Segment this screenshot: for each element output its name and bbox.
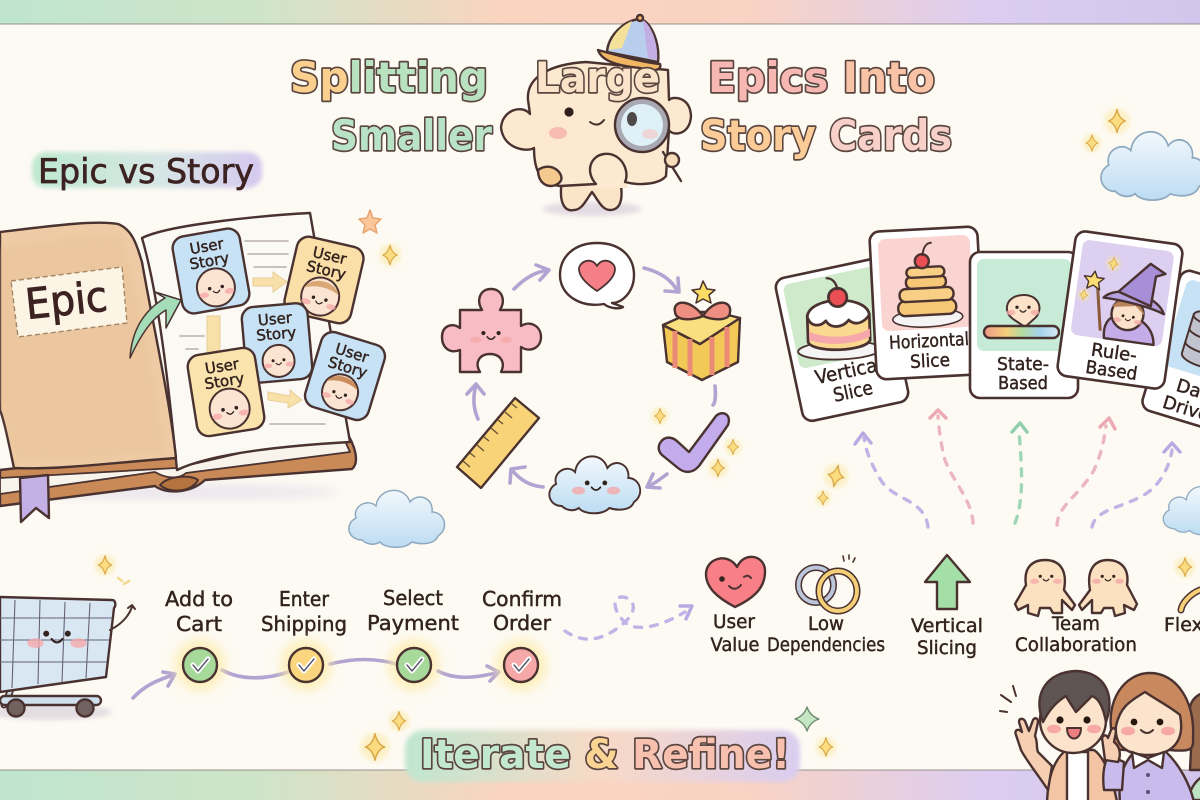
character: third child xyxy=(1188,692,1200,800)
step: enter shipping: Enter xyxy=(279,587,330,611)
value: vertical slicing: Vertical xyxy=(911,615,983,637)
card: horizontal slice xyxy=(869,226,985,380)
story card: user story 1: Story xyxy=(188,249,231,273)
sparkles: top right xyxy=(1083,108,1130,152)
banner: Iterate & Refine!: Iterate & Refine! xyxy=(420,732,790,778)
mascot: puzzle piece detective xyxy=(501,62,691,216)
cloud: centre left xyxy=(349,490,445,547)
step: select payment xyxy=(367,586,459,691)
step: select payment: Select xyxy=(383,586,443,610)
sparkles right of banner xyxy=(795,707,836,757)
story card: user story 2 xyxy=(282,234,366,326)
value: user value: User xyxy=(713,611,755,633)
story card: user story 5: User xyxy=(204,355,241,378)
title: Epics Into xyxy=(708,53,935,102)
cycle arrows xyxy=(467,265,715,488)
value: low dependencies: Low xyxy=(808,613,844,635)
story card: user story 1 xyxy=(171,227,251,315)
value: user value: Value xyxy=(710,634,760,656)
card: rule based xyxy=(1056,230,1184,390)
card: horizontal slice: Slice xyxy=(910,350,951,373)
story card: user story 3: Story xyxy=(256,323,297,345)
team characters xyxy=(1000,671,1200,800)
character: boy xyxy=(1000,671,1117,800)
story card: user story 4: Story xyxy=(326,353,370,382)
card: state based: State- xyxy=(997,354,1049,375)
icon: gift box with star xyxy=(663,281,740,380)
step: select payment: Payment xyxy=(367,611,459,635)
icon: purple check with sparkles xyxy=(652,408,741,478)
story card: user story 2: Story xyxy=(305,257,348,284)
card: state based xyxy=(970,252,1078,398)
story card: user story 5 xyxy=(186,346,266,438)
icon: ruler xyxy=(457,398,539,488)
cloud: top right xyxy=(1101,132,1200,200)
bottom watercolor band xyxy=(0,770,1200,800)
sparkle above cart xyxy=(95,555,129,584)
card: state based: Based xyxy=(998,373,1048,394)
title xyxy=(290,53,952,160)
story card: user story 3 xyxy=(241,302,313,384)
value: vertical slicing xyxy=(911,555,983,659)
cloud: right edge xyxy=(1163,486,1200,535)
book: Epic with user stories xyxy=(0,213,356,522)
step: add to cart: Add to xyxy=(165,587,233,611)
title: Smaller xyxy=(331,111,492,160)
title: Large xyxy=(535,53,660,102)
icon: shopping cart xyxy=(0,597,135,720)
card: data driven xyxy=(1140,268,1200,440)
card: rule based: Rule- xyxy=(1090,339,1138,367)
value: team collaboration: Team xyxy=(1051,613,1100,635)
arrow: epic to stories xyxy=(130,292,181,358)
sparkles near banner xyxy=(361,711,409,761)
story card: user story 1: User xyxy=(188,234,226,258)
label: Epic xyxy=(11,267,127,337)
mascot hat xyxy=(598,15,660,70)
checkout flow xyxy=(133,586,562,698)
value: low dependencies xyxy=(767,555,885,656)
value: team collaboration xyxy=(1015,560,1137,656)
step: confirm order xyxy=(482,587,562,691)
sparkles near book xyxy=(359,210,401,266)
card: vertical slice: Vertical xyxy=(813,353,884,389)
icon: puzzle piece xyxy=(442,289,541,372)
story card: user story 4 xyxy=(302,329,388,423)
title: Splitting xyxy=(290,53,488,102)
card: rule based: Based xyxy=(1084,357,1139,385)
story card: user story 5: Story xyxy=(203,369,246,393)
value: low dependencies: Dependencies xyxy=(767,634,885,656)
small connecting arrows in book xyxy=(207,272,302,408)
value: flexibility (cut off at edge) xyxy=(1164,557,1200,636)
story card: user story 2: User xyxy=(311,243,349,268)
card: vertical slice xyxy=(774,257,910,423)
flow path arrows xyxy=(133,660,499,698)
title: Story Cards xyxy=(700,111,952,160)
story card: user story 3: User xyxy=(257,309,293,330)
value: user value xyxy=(706,557,765,656)
step: add to cart: Cart xyxy=(176,612,222,636)
card: horizontal slice: Horizontal xyxy=(889,329,970,354)
dashed arrows to cards xyxy=(855,410,1180,527)
top watercolor band xyxy=(0,0,1200,24)
card: vertical slice: Slice xyxy=(831,377,875,407)
value: vertical slicing: Slicing xyxy=(917,637,977,659)
step: confirm order: Confirm xyxy=(482,587,562,611)
step: enter shipping: Shipping xyxy=(261,612,347,636)
sparkles near cards xyxy=(815,462,850,506)
step: add to cart xyxy=(165,587,233,691)
dashed loop arrow xyxy=(565,597,692,639)
recipe cards xyxy=(774,226,1200,440)
icon: smiling cloud xyxy=(549,456,640,513)
value: team collaboration: Collaboration xyxy=(1015,634,1137,656)
step: confirm order: Order xyxy=(493,611,552,635)
step: enter shipping xyxy=(261,587,347,691)
heading: Epic vs Story: Epic vs Story xyxy=(38,152,254,192)
label: Epic: Epic xyxy=(23,272,110,329)
story card: user story 4: User xyxy=(333,339,372,367)
icon: heart speech bubble xyxy=(560,243,634,308)
character: girl xyxy=(1102,673,1194,800)
